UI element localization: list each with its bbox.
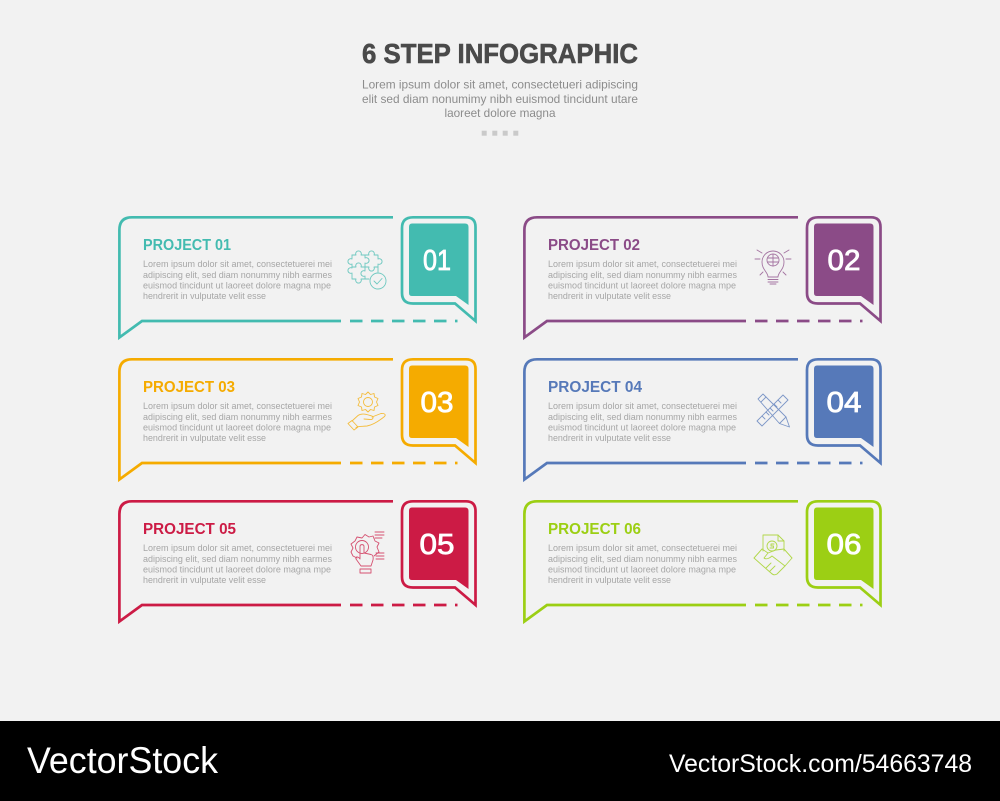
heading 05: PROJECT 05 bbox=[143, 521, 236, 538]
text block 02: hendrerit in vulputate velit esse bbox=[548, 291, 671, 301]
text block 04: adipiscing elit, sed diam nonummy nibh earmes bbox=[548, 412, 737, 422]
icon: gear on hand bbox=[348, 392, 385, 430]
text block 01: hendrerit in vulputate velit esse bbox=[143, 291, 266, 301]
text block 06: hendrerit in vulputate velit esse bbox=[548, 575, 671, 585]
text block 03: adipiscing elit, sed diam nonummy nibh earmes bbox=[143, 412, 332, 422]
text block 05: euismod tincidunt ut laoreet dolore magna mpe bbox=[143, 564, 331, 574]
subtitle text block: Lorem ipsum dolor sit amet, consectetueri adipiscing bbox=[362, 78, 638, 92]
panel: project 02 bbox=[524, 217, 880, 338]
number block 03 bbox=[409, 366, 468, 447]
subtitle text block bbox=[362, 78, 638, 120]
footer logo text: VectorStock bbox=[27, 740, 218, 781]
number block 02 bbox=[814, 224, 874, 305]
text block 02 bbox=[548, 259, 737, 301]
text block 04: Lorem ipsum dolor sit amet, consectetuerei mei bbox=[548, 401, 737, 411]
text block 04: hendrerit in vulputate velit esse bbox=[548, 433, 671, 443]
icon: ruler and pencil bbox=[757, 394, 790, 427]
text block 06: Lorem ipsum dolor sit amet, consectetuerei mei bbox=[548, 543, 737, 553]
text block 04: euismod tincidunt ut laoreet dolore magna mpe bbox=[548, 422, 736, 432]
panel: project 03 bbox=[119, 359, 476, 480]
icon: handshake with document bbox=[754, 535, 792, 575]
text block 05: adipiscing elit, sed diam nonummy nibh earmes bbox=[143, 554, 332, 564]
text block 06 bbox=[548, 543, 737, 585]
number block 04 bbox=[814, 366, 874, 447]
text block 01: Lorem ipsum dolor sit amet, consectetuerei mei bbox=[143, 259, 332, 269]
heading dots bbox=[482, 131, 518, 136]
number block 05: 05 bbox=[420, 529, 454, 561]
panel: project 05 bbox=[119, 501, 476, 622]
number block 01 bbox=[409, 224, 468, 305]
text block 01: euismod tincidunt ut laoreet dolore magna mpe bbox=[143, 280, 331, 290]
heading 04: PROJECT 04 bbox=[548, 379, 642, 396]
icon: light bulb with brain bbox=[755, 250, 791, 284]
text block 03: Lorem ipsum dolor sit amet, consectetuerei mei bbox=[143, 401, 332, 411]
text block 06: euismod tincidunt ut laoreet dolore magna mpe bbox=[548, 564, 736, 574]
subtitle text block: elit sed diam nonumimy nibh euismod tincidunt utare bbox=[362, 92, 638, 106]
text block 01 bbox=[143, 259, 332, 301]
heading 01: PROJECT 01 bbox=[143, 237, 231, 254]
title: 6 STEP INFOGRAPHIC bbox=[362, 38, 638, 69]
panel: project 01 bbox=[119, 217, 476, 338]
text block 05: hendrerit in vulputate velit esse bbox=[143, 575, 266, 585]
number block 04: 04 bbox=[826, 387, 862, 419]
heading 06: PROJECT 06 bbox=[548, 521, 641, 538]
text block 02: adipiscing elit, sed diam nonummy nibh earmes bbox=[548, 270, 737, 280]
text block 03: euismod tincidunt ut laoreet dolore magna mpe bbox=[143, 422, 331, 432]
text block 05: Lorem ipsum dolor sit amet, consectetuerei mei bbox=[143, 543, 332, 553]
text block 06: adipiscing elit, sed diam nonummy nibh earmes bbox=[548, 554, 737, 564]
number block 02: 02 bbox=[828, 245, 860, 277]
panel: project 06 bbox=[524, 501, 880, 622]
text block 03 bbox=[143, 401, 332, 443]
footer url text: VectorStock.com/54663748 bbox=[669, 750, 972, 778]
number block 01: 01 bbox=[423, 245, 451, 277]
footer bar bbox=[0, 721, 1000, 801]
text block 02: euismod tincidunt ut laoreet dolore magna mpe bbox=[548, 280, 736, 290]
number block 06: 06 bbox=[826, 529, 862, 561]
text block 02: Lorem ipsum dolor sit amet, consectetuerei mei bbox=[548, 259, 737, 269]
icon: hand touching gear bbox=[351, 532, 384, 573]
text block 05 bbox=[143, 543, 332, 585]
text block 04 bbox=[548, 401, 737, 443]
text block 01: adipiscing elit, sed diam nonummy nibh earmes bbox=[143, 270, 332, 280]
number block 03: 03 bbox=[420, 387, 454, 419]
heading 02: PROJECT 02 bbox=[548, 237, 640, 254]
heading 03: PROJECT 03 bbox=[143, 379, 235, 396]
panel: project 04 bbox=[524, 359, 880, 480]
number block 05 bbox=[409, 508, 468, 589]
icon: puzzle with check bbox=[348, 251, 386, 289]
text block 03: hendrerit in vulputate velit esse bbox=[143, 433, 266, 443]
subtitle text block: laoreet dolore magna bbox=[444, 106, 556, 120]
number block 06 bbox=[814, 508, 874, 589]
